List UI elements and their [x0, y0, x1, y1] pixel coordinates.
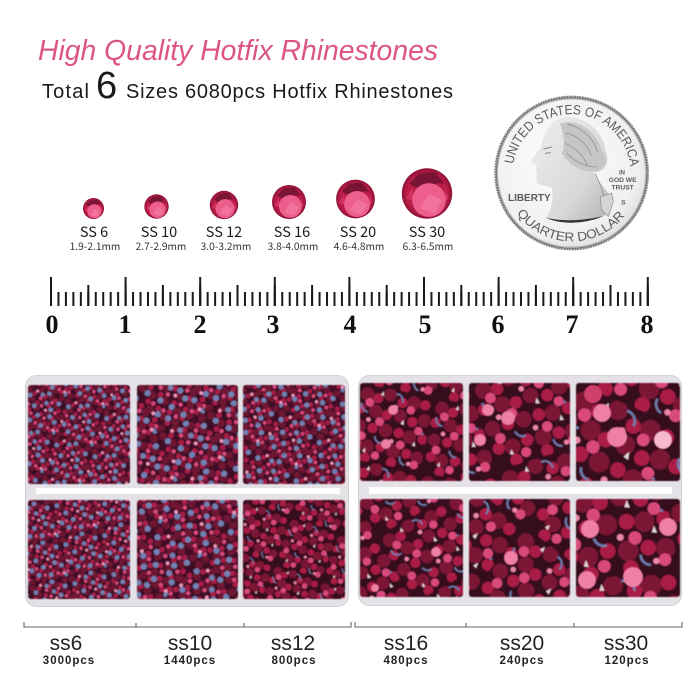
subtitle: Sizes 6080pcs Hotfix Rhinestones [126, 81, 453, 103]
label: ss16 [383, 632, 429, 667]
cell: ss12 bottom [243, 500, 345, 599]
title: High Quality Hotfix Rhinestones [38, 35, 438, 67]
cell: ss30 top [576, 383, 680, 481]
label: ss10: ss10 [168, 632, 212, 655]
label: ss10 [164, 632, 216, 667]
stone: SS 30: SS 30 [409, 221, 445, 242]
ruler ticks [50, 292, 650, 299]
stone: SS 6: SS 6 [80, 221, 108, 242]
label: ss12 [271, 632, 317, 667]
bracket: right [355, 622, 682, 627]
stone: SS 16: SS 16 [274, 221, 310, 242]
label: ss30 [604, 632, 650, 667]
label: ss12: 800pcs [271, 655, 317, 667]
subtitle: 6 [96, 65, 117, 107]
icon: quarter coin [494, 96, 650, 250]
cell: ss10 top [137, 385, 238, 484]
stone: SS 16: 3.8-4.0mm [268, 238, 318, 253]
cell: ss6 bottom [28, 500, 130, 599]
bracket: left [24, 622, 351, 627]
label: ss6 [43, 632, 95, 667]
cell: ss10 bottom [137, 500, 238, 599]
label: ss6: 3000pcs [43, 655, 95, 667]
stone: SS 6: 1.9-2.1mm [70, 238, 120, 253]
highlighted stones [371, 385, 677, 592]
ruler numbers: 1 [118, 310, 132, 339]
label: ss20: ss20 [500, 632, 544, 655]
coin lettering: TRUST [612, 184, 634, 191]
ruler numbers: 8 [640, 310, 654, 339]
cell: ss16 top [360, 383, 463, 481]
cell: ss6 top [28, 385, 130, 484]
coin lettering: UNITED STATES OF AMERICA [504, 104, 639, 167]
stone: SS 12: SS 12 [206, 221, 242, 242]
cell: ss20 bottom [469, 499, 570, 597]
stone: SS 12: 3.0-3.2mm [201, 238, 251, 253]
ruler [46, 292, 654, 339]
ruler numbers: 3 [266, 310, 280, 339]
coin lettering: S [621, 199, 626, 206]
stone: SS 6 [70, 198, 120, 253]
stone: SS 30 [402, 168, 453, 253]
label: ss6: ss6 [50, 632, 82, 655]
ruler numbers [46, 310, 654, 339]
coin lettering: QUARTER DOLLAR [518, 210, 624, 242]
ruler numbers: 0 [46, 310, 58, 339]
cell: ss16 bottom [360, 499, 463, 597]
stone: SS 10 [136, 194, 186, 253]
portrait [532, 117, 613, 223]
subtitle [42, 65, 453, 107]
ruler numbers: 5 [418, 310, 432, 339]
stone: SS 30: 6.3-6.5mm [403, 238, 453, 253]
label: ss30: ss30 [604, 632, 648, 655]
ruler numbers: 7 [566, 310, 578, 339]
ruler numbers: 6 [492, 310, 504, 339]
cell: ss12 top [243, 385, 345, 484]
panel: right tray [358, 376, 682, 606]
stone: SS 20: SS 20 [340, 221, 376, 242]
label: ss10: 1440pcs [164, 655, 216, 667]
coin lettering: GOD WE [609, 177, 637, 184]
label: ss16: ss16 [384, 632, 428, 655]
stone: SS 16 [268, 185, 318, 253]
coin lettering: IN [619, 171, 625, 177]
cell: ss30 bottom [576, 499, 680, 597]
label: ss16: 480pcs [383, 655, 429, 667]
stone: SS 20 [334, 180, 384, 253]
size chart [70, 168, 453, 253]
stone: SS 20: 4.6-4.8mm [334, 238, 384, 253]
stone: SS 10: SS 10 [141, 221, 177, 242]
stone: SS 10: 2.7-2.9mm [136, 238, 186, 253]
coin lettering [504, 104, 639, 242]
label: ss20: 240pcs [499, 655, 545, 667]
label: ss12: ss12 [271, 632, 315, 655]
coin lettering: LIBERTY [508, 193, 551, 204]
label: ss30: 120pcs [604, 655, 650, 667]
label: ss20 [499, 632, 545, 667]
stone: SS 12 [201, 191, 251, 253]
ruler numbers: 2 [194, 310, 206, 339]
subtitle: Total [42, 81, 89, 103]
cell: ss20 top [469, 383, 570, 481]
ruler numbers: 4 [344, 310, 356, 339]
panel: left tray [26, 376, 348, 606]
